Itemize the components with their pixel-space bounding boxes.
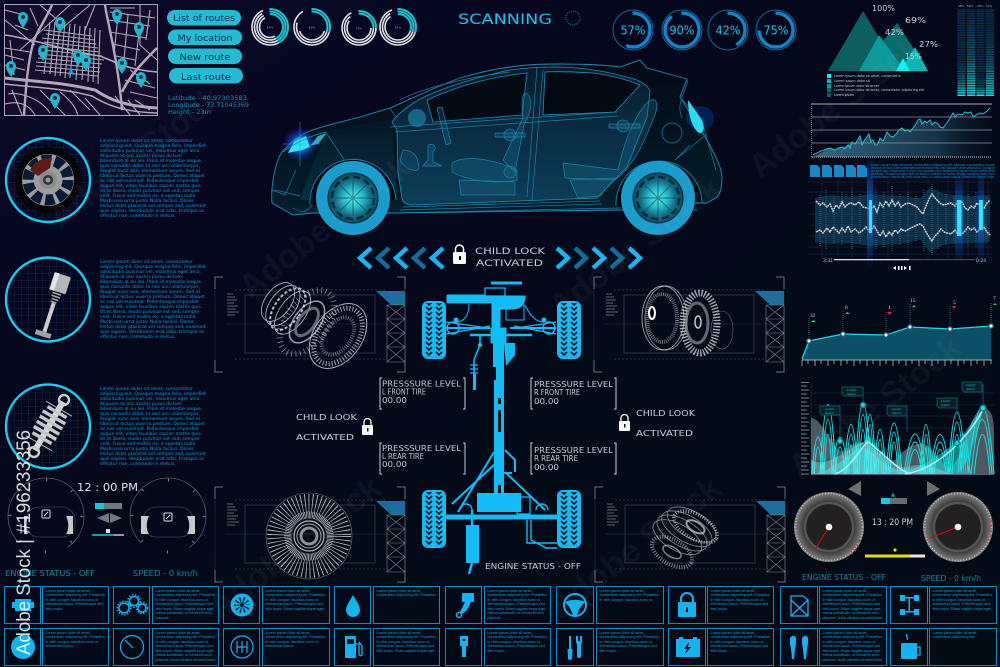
text cell	[707, 628, 774, 666]
ring indicators: 70%	[356, 26, 362, 30]
playback bar	[823, 258, 986, 270]
icon: piston	[445, 586, 482, 624]
status labels: SPEED - 0 km/h	[921, 574, 981, 583]
faint stock watermarks: Adobe Stock	[542, 168, 729, 326]
area line chart	[802, 296, 997, 366]
waveform panel	[808, 150, 992, 270]
left rear tire: PRESSSURE LEVEL	[382, 444, 462, 453]
icon: engine block	[4, 586, 41, 624]
text cell: Lorem ipsum dolor sit amet, consectetur adipiscing elit. Phasellus in nibh congue, faucibus nunc ut, elementum lacus. Pellentesque sed felis turpis. Etiam sagittis turpis eget metus sollicitudin, ut hendrerit arcu placerat. Nulla ultricies sit amet tortor	[822, 630, 882, 662]
centre controls	[92, 503, 124, 535]
child look left: CHILD LOOK	[296, 413, 358, 422]
text cell: Lorem ipsum dolor sit amet, consectetur adipiscing elit. Phasellus in nibh congue, faucibus nunc ut, elementum lacus. Pellentesque sed felis turpis. Etiam sagittis turpis eget metus sollicitudin, ut hendrerit arcu placerat.	[488, 588, 547, 620]
icon circle: wheel	[6, 138, 90, 222]
lock text: ACTIVATED	[476, 259, 543, 269]
text cell	[929, 628, 997, 666]
level bar	[881, 493, 907, 504]
icon: key	[445, 628, 482, 666]
text block: shock absorber description: Lorem ipsum dolor sit amet, consectetur adipiscing elit. Quisque magna felis, imperdiet sollicitudin pulvinar vel, maximus eget arcu. Aliquam at orci auctor purus dictum bibendum at eu leo. Proin id molestie neque, quis convallis dolor. In nec orci ullamcorper, feugiat nunc non, elementum ipsum. Sed at libero ut lectus viverra pretium. Donec aliquet ac nisi vel euismod. Pellentesque imperdiet augue elit, vitae faucibus sapien mattis quis. Ut et libero, mollis pulvinar est sed, semper velit. Fusce sed mattis ex, a egestas nulla. Morbi non urna justo. Nulla facilisi. Donec lectus dolor placerat vel semper sed, euismod quis sapien. Vestibulum erat odio, tristique ac efficitur non, commodo in metus.	[100, 387, 206, 467]
text cell: Lorem ipsum dolor sit amet, consectetur adipiscing elit. Phasellus in nibh congue, faucibus nunc ut, elementum lacus. Pellentesque sed felis turpis. Etiam sagittis turpis eget metus sollicitudin, ut hendrerit arcu placerat.	[156, 588, 215, 620]
yellow fuel bar	[865, 548, 925, 558]
left rear tire: L REAR TIRE	[382, 452, 424, 461]
percentage dials: 57%	[620, 24, 646, 38]
gear panel top right	[594, 277, 784, 372]
triangle chart: Lorem ipsum dolor sit amet, consectetur	[834, 74, 902, 78]
equaliser bars	[957, 4, 995, 96]
equaliser bars: 28%	[977, 4, 984, 8]
icon: seats	[780, 628, 818, 666]
text cell: Lorem ipsum dolor sit amet, consectetur adipiscing elit. Phasellus	[376, 588, 436, 597]
wave spectrum chart: ipsum	[966, 387, 975, 391]
icon: padlock	[668, 586, 706, 624]
scanning heading	[458, 11, 580, 28]
route buttons: List of routes	[173, 14, 235, 24]
right front tire	[531, 378, 616, 409]
triangle chart: 15%	[905, 52, 922, 61]
grey hills	[811, 408, 994, 475]
wave spectrum chart: Lorem	[825, 407, 834, 411]
car	[272, 60, 722, 235]
icon: engine head	[4, 628, 41, 666]
icon: canister	[780, 586, 818, 624]
route buttons: My location	[178, 34, 232, 44]
front wheel	[316, 161, 390, 235]
right front tire: PRESSSURE LEVEL	[534, 380, 614, 389]
speed dial	[114, 462, 222, 570]
percentage dials	[613, 10, 796, 50]
playback bar: 0:24	[976, 258, 986, 264]
icon: gears	[113, 586, 150, 624]
percentage dials: 42%	[716, 24, 740, 38]
front fender shade	[300, 120, 397, 200]
clock: 13 : 20 PM	[872, 518, 913, 528]
text cell: Lorem ipsum dolor sit amet, consectetur adipiscing elit. Phasellus in nibh congue, faucibus nunc ut, elementum lacus. Pellentesque sed felis turpis. Etiam sagittis turpis eget metus sollicitudin, ut hendrerit arcu placerat. Nulla ultricies sit amet tortor	[822, 588, 882, 620]
text cell: Lorem ipsum dolor sit amet, consectetur adipiscing elit. Phasellus in nibh congue, faucibus nunc ut, elementum lacus.	[266, 630, 325, 648]
ring indicators: 63%	[309, 26, 315, 30]
chassis	[422, 283, 581, 574]
front axle and engine	[446, 283, 556, 390]
rear axle and exhaust	[446, 450, 557, 574]
stock id watermark: Adobe Stock | #196233356	[14, 430, 35, 655]
small data text: Lorem ipsum dolor sit amet, consectetur adipiscing elit. Aliquam consectetur ornare	[871, 163, 995, 167]
clock: 12 : 00 PM	[77, 482, 138, 494]
ring indicators	[252, 9, 416, 45]
equaliser bars: 51%	[986, 4, 993, 8]
triangle chart: Lorem ipsum	[834, 93, 855, 97]
coordinates: Height - 23m	[168, 109, 211, 116]
left front tire: PRESSSURE LEVEL	[382, 380, 462, 388]
area line chart: 5	[953, 300, 956, 306]
engine status centre: ENGINE STATUS - OFF	[485, 562, 581, 571]
faint stock watermarks: Adobe Stock	[232, 148, 419, 306]
left dashboard	[0, 462, 222, 578]
document icons	[810, 165, 867, 177]
text cell: Lorem ipsum dolor sit amet, consectetur adipiscing elit. Phasellus in nibh congue, faucibus nunc ut, elementum lacus. Pellentesque sed felis turpis. Etiam sagittis turpis eget metus sollicitudin, ut hendrerit arcu placerat. Nulla ultricies sit amet tortor	[156, 630, 215, 662]
right front tire: R FRONT TIRE	[534, 388, 580, 397]
status labels	[5, 569, 198, 578]
text cell	[707, 586, 774, 624]
wave spectrum chart: Lorem	[941, 399, 950, 403]
text cell: Lorem ipsum dolor sit amet, consectetur adipiscing elit. Phasellus in nibh congue, faucibus nunc ut, elementum lacus. Pellentesque sed felis turpis. Etiam sagittis turpis eget	[376, 630, 436, 652]
route buttons: New route	[180, 53, 231, 63]
drive shaft	[493, 343, 515, 512]
playback bar: 3:31	[823, 258, 833, 264]
triangle chart: 42%	[885, 28, 904, 37]
area line chart: 1	[888, 305, 891, 311]
engine dial	[0, 462, 100, 570]
left rear tire	[380, 443, 465, 474]
small data text: consectetur. Morbi vel erat vitae felis, a malesuada metus. Etiam tincidunt nulla.	[871, 175, 995, 179]
icon: steering wheel	[556, 586, 594, 624]
right chevrons	[557, 248, 640, 268]
wave spectrum chart	[801, 382, 994, 475]
status labels: ENGINE STATUS - OFF	[802, 573, 886, 582]
icon: oil drop	[334, 586, 371, 624]
faint stock watermarks: Adobe Stock	[42, 78, 229, 236]
speed gauge	[923, 492, 993, 562]
car body	[272, 60, 722, 215]
icon: gear shift	[223, 628, 260, 666]
right rear tire	[531, 443, 616, 474]
headlight glow	[283, 122, 327, 166]
wave spectrum chart: Lorem	[847, 388, 856, 392]
text block: valve description: Lorem ipsum dolor sit amet, consectetur adipiscing elit. Quisque magna felis, imperdiet sollicitudin pulvinar vel, maximus eget arcu. Aliquam at orci auctor purus dictum bibendum at eu leo. Proin id molestie neque, quis convallis dolor. In nec orci ullamcorper, feugiat nunc non, elementum ipsum. Sed at libero ut lectus viverra pretium. Donec aliquet ac nisi vel euismod. Pellentesque imperdiet augue elit, vitae faucibus sapien mattis quis. Ut et libero, mollis pulvinar est sed, semper velit. Fusce sed mattis ex, a egestas nulla. Morbi non urna justo. Nulla facilisi. Donec lectus dolor placerat vel semper sed, euismod quis sapien. Vestibulum erat odio, tristique ac efficitur non, commodo in metus.	[100, 260, 206, 340]
line chart	[811, 104, 992, 157]
triangle chart: Lorem ipsum dolor sit	[834, 79, 871, 83]
text cell	[373, 586, 440, 624]
faint stock watermarks: Adobe Stock	[782, 328, 969, 486]
windows	[427, 72, 640, 122]
right dashboard	[794, 481, 993, 583]
ring indicators: 45%	[267, 26, 273, 30]
status labels: SPEED - 0 km/h	[133, 569, 198, 578]
child look right	[619, 409, 696, 438]
icon circle: shock absorber	[6, 384, 90, 468]
text cell	[596, 628, 664, 666]
wheel arches	[310, 159, 702, 206]
faint stock watermarks: Adobe Stock	[542, 468, 729, 626]
left chevrons	[360, 248, 443, 268]
seats	[400, 93, 682, 198]
text cell: Lorem ipsum dolor sit amet, consectetur adipiscing elit. Phasellus in nibh congue, faucibus nunc ut, elementum lacus. Pellentesque sed felis turpis.	[46, 588, 105, 610]
icon: battery	[668, 628, 706, 666]
right front tire: 00.00	[534, 397, 559, 406]
area line chart: 8	[845, 305, 848, 311]
scanning heading: SCANNING	[458, 12, 552, 28]
child look left: ACTIVATED	[296, 433, 354, 442]
equaliser bars: 56%	[967, 4, 974, 8]
left rear tire: 00.00	[382, 460, 407, 469]
triangle chart: Lorem ipsum dolor sit amet, consectetur adipiscing elit	[834, 88, 925, 92]
area line chart: 32	[810, 313, 816, 319]
small data text: congue sem vitae dolor luctus, non sodales nisi. Vestibulum ornare lacus sed facilisis	[871, 169, 995, 173]
right rear tire: PRESSSURE LEVEL	[534, 446, 614, 455]
child look right: ACTIVATED	[636, 429, 693, 438]
small data text	[871, 163, 995, 179]
text cell: Lorem ipsum dolor sit amet, consectetur adipiscing elit. Phasellus in nibh congue, faucibus nunc ut, elementum lacus. Pellentesque sed felis turpis. Etiam sagittis turpis eget.	[266, 588, 325, 610]
small data text: magna at risus. Nam pellentesque tincidunt dui, nec aliquam ante vehicula a. Quisque	[871, 166, 995, 170]
icon: gauge	[113, 628, 150, 666]
wave spectrum chart: Lorem	[892, 407, 901, 411]
icon: axle	[890, 586, 928, 624]
text cell	[373, 628, 440, 666]
ring indicators: 51%	[395, 26, 401, 30]
triangle chart: 100%	[872, 4, 895, 13]
left front tire: 00.00	[382, 396, 407, 405]
text block: wheel description: Lorem ipsum dolor sit amet, consectetur adipiscing elit. Quisque magna felis, imperdiet sollicitudin pulvinar vel, maximus eget arcu. Aliquam at orci auctor purus dictum bibendum at eu leo. Proin id molestie neque, quis convallis dolor. In nec orci ullamcorper, feugiat nunc non, elementum ipsum. Sed at libero ut lectus viverra pretium. Donec aliquet ac nisi vel euismod. Pellentesque imperdiet augue elit, vitae faucibus sapien mattis quis. Ut et libero, mollis pulvinar est sed, semper velit. Fusce sed mattis ex, a egestas nulla. Morbi non urna justo. Nulla facilisi. Donec lectus dolor placerat vel semper sed, euismod quis sapien. Vestibulum erat odio, tristique ac efficitur non, commodo in metus.	[100, 139, 206, 219]
chart pins	[820, 382, 983, 439]
text cell	[42, 586, 109, 624]
left front tire	[380, 378, 465, 409]
status labels	[802, 573, 981, 583]
text cell	[42, 628, 109, 666]
icon: tools	[556, 628, 594, 666]
wave spectrum chart: Lorem	[966, 383, 975, 387]
status labels: ENGINE STATUS - OFF	[5, 569, 95, 578]
right rear tire: 00.00	[534, 463, 559, 472]
text cell	[596, 586, 664, 624]
lock text: CHILD LOCK	[475, 247, 546, 257]
text cell: Lorem ipsum dolor sit amet, consectetur adipiscing elit. Phasellus in nibh congue, faucibus nunc ut, elementum lacus. Pellentesque sed felis turpis. Etiam sagittis turpis eget.	[932, 588, 992, 610]
coordinates: Latitude - 40.97303583	[168, 95, 247, 102]
child look left	[296, 413, 373, 442]
area line chart: 7	[993, 296, 996, 302]
icon: coffee mug	[890, 628, 928, 666]
icon circle: shock valve	[6, 258, 90, 342]
gear panel bottom right	[595, 487, 785, 582]
text cell: Lorem ipsum dolor sit amet consectetur adipiscing elit.	[932, 630, 976, 639]
triangle chart: Lorem ipsum dolor sit amet	[834, 84, 880, 88]
text cell: Lorem ipsum dolor sit amet, consectetur adipiscing elit. Phasellus in nibh congue, faucibus nunc ut, elementum lacus. Pellentesque sed felis turpis.	[600, 630, 659, 652]
text cell: Lorem ipsum dolor sit amet, consectetur adipiscing elit. Phasellus in nibh congue, faucibus nunc ut, elementum lacus.	[46, 630, 105, 648]
lock icon	[453, 245, 466, 264]
tail light glow	[686, 100, 714, 133]
text cell	[929, 586, 997, 624]
icon: turbine	[223, 586, 260, 624]
text cell: Lorem ipsum dolor sit amet, consectetur adipiscing elit. Phasellus in nibh congue, faucibus nunc ut, elementum lacus. Pellentesque sed felis turpis.	[710, 588, 770, 610]
small data text: volutpat. Phasellus eget nibh eu lectus, pretium et tortor. Nullam pretium odio arcu	[871, 172, 995, 176]
triangle chart: 27%	[919, 40, 938, 49]
triangle chart: 69%	[905, 16, 926, 25]
child look right: CHILD LOOK	[636, 409, 696, 418]
text cell	[262, 628, 330, 666]
coordinates: Longitude - 73.71045369	[168, 102, 249, 109]
child lock banner	[360, 245, 640, 269]
gear panel bottom left	[215, 487, 405, 582]
faint stock watermarks: Adobe Stock	[202, 468, 389, 626]
text cell	[484, 628, 551, 666]
right rear tire: R REAR TIRE	[534, 454, 578, 463]
triangle chart	[827, 4, 938, 97]
equaliser bars: 46%	[958, 4, 965, 8]
wave spectrum chart: ipsum	[825, 411, 834, 415]
interior lines	[272, 67, 716, 213]
area line chart: 15	[910, 298, 916, 304]
text cell	[262, 586, 330, 624]
percentage dials: 75%	[764, 24, 788, 38]
route buttons	[167, 10, 243, 84]
coordinates	[168, 95, 249, 116]
map panel	[4, 4, 158, 116]
gear panel top left	[215, 274, 405, 379]
icon: fuel pump	[334, 628, 371, 666]
cyan waves	[811, 410, 983, 474]
wave spectrum chart: ipsum	[941, 403, 950, 407]
door interior	[392, 67, 650, 205]
direction arrows	[848, 481, 940, 496]
route buttons: Last route	[181, 73, 232, 83]
percentage dials: 90%	[670, 24, 694, 38]
faint stock watermarks: Adobe Stock	[742, 28, 929, 186]
text cell: Lorem ipsum dolor sit amet, consectetur adipiscing elit. Phasellus in nibh congue, faucibus nunc ut, elementum lacus. Pellentesque sed felis turpis.	[488, 630, 547, 652]
wave spectrum chart: ipsum	[892, 411, 901, 415]
wave spectrum chart: ipsum	[847, 392, 856, 396]
lock text	[475, 247, 546, 269]
tires	[422, 301, 581, 548]
text cell: Lorem ipsum dolor sit amet, consectetur adipiscing elit. Phasellus in nibh congue, faucibus nunc ut, elementum lacus. Pellentesque sed felis turpis.	[710, 630, 770, 652]
pressure readouts	[380, 378, 616, 474]
rpm gauge	[794, 492, 864, 562]
text cell: Lorem ipsum dolor sit amet, consectetur adipiscing elit. Phasellus in nibh congue, faucibus nunc ut.	[600, 588, 659, 602]
left front tire: L FRONT TIRE	[382, 388, 426, 396]
rear wheel	[621, 161, 695, 235]
